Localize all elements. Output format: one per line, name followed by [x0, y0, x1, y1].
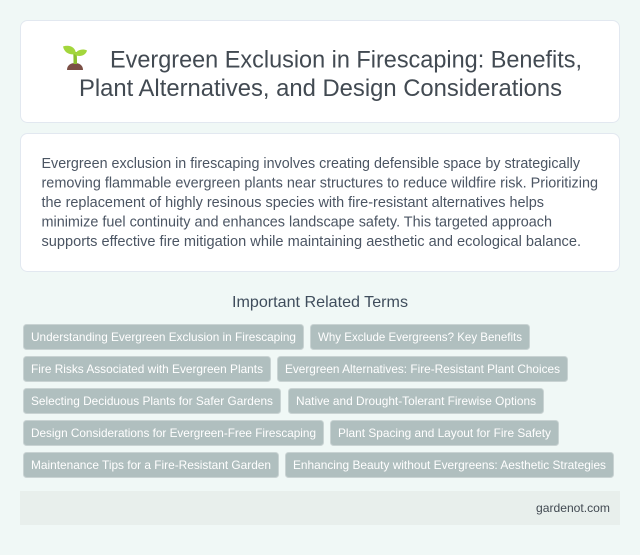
chip: alternatives: Evergreen Alternatives: Fire-Resistant Plant Choices	[285, 362, 560, 376]
title: Plant Alternatives, and Design Considerations	[79, 75, 562, 102]
chip: design	[24, 420, 324, 446]
chip: fire risks: Fire Risks Associated with Evergreen Plants	[31, 362, 263, 376]
description text	[42, 156, 598, 250]
related terms chips	[24, 324, 614, 478]
title	[79, 46, 582, 102]
description text: the replacement of highly resinous species with fire-resistant alternatives helps	[42, 195, 544, 211]
chip: beauty: Enhancing Beauty without Evergreens: Aesthetic Strategies	[293, 458, 606, 472]
chip: fire risks	[24, 356, 270, 382]
chip: maintenance	[24, 452, 278, 478]
description text: removing flammable evergreen plants near structures to reduce wildfire risk. Prioritizing	[42, 176, 598, 192]
chip: beauty	[286, 452, 614, 478]
chip: design: Design Considerations for Evergreen-Free Firescaping	[31, 426, 316, 440]
chip: native	[288, 388, 544, 414]
description text: Evergreen exclusion in firescaping involves creating defensible space by strategically	[42, 156, 581, 172]
chip: why exclude: Why Exclude Evergreens? Key Benefits	[318, 330, 522, 344]
chip: maintenance: Maintenance Tips for a Fire-Resistant Garden	[31, 458, 271, 472]
heading: important related terms: Important Related Terms	[232, 294, 408, 311]
chip: understanding	[24, 324, 304, 350]
chip: deciduous	[24, 388, 280, 414]
description text: minimize fuel continuity and enhances landscape safety. This targeted approach	[42, 214, 552, 230]
panel: description card	[20, 134, 620, 272]
chip: deciduous: Selecting Deciduous Plants for Safer Gardens	[31, 394, 273, 408]
panel: title card	[20, 20, 620, 122]
chip: alternatives	[278, 356, 568, 382]
chip: understanding: Understanding Evergreen Exclusion in Firescaping	[31, 330, 296, 344]
title: Evergreen Exclusion in Firescaping: Benefits,	[110, 46, 582, 74]
chip: native: Native and Drought-Tolerant Firewise Options	[296, 394, 536, 408]
footer: gardenot.com	[536, 501, 610, 515]
description text: supports effective fire mitigation while maintaining aesthetic and ecological balance.	[42, 234, 581, 250]
chip: why exclude	[310, 324, 530, 350]
chip: spacing: Plant Spacing and Layout for Fire Safety	[338, 426, 551, 440]
footer	[20, 491, 620, 525]
icon: sprout	[63, 46, 87, 70]
chip: spacing	[330, 420, 558, 446]
